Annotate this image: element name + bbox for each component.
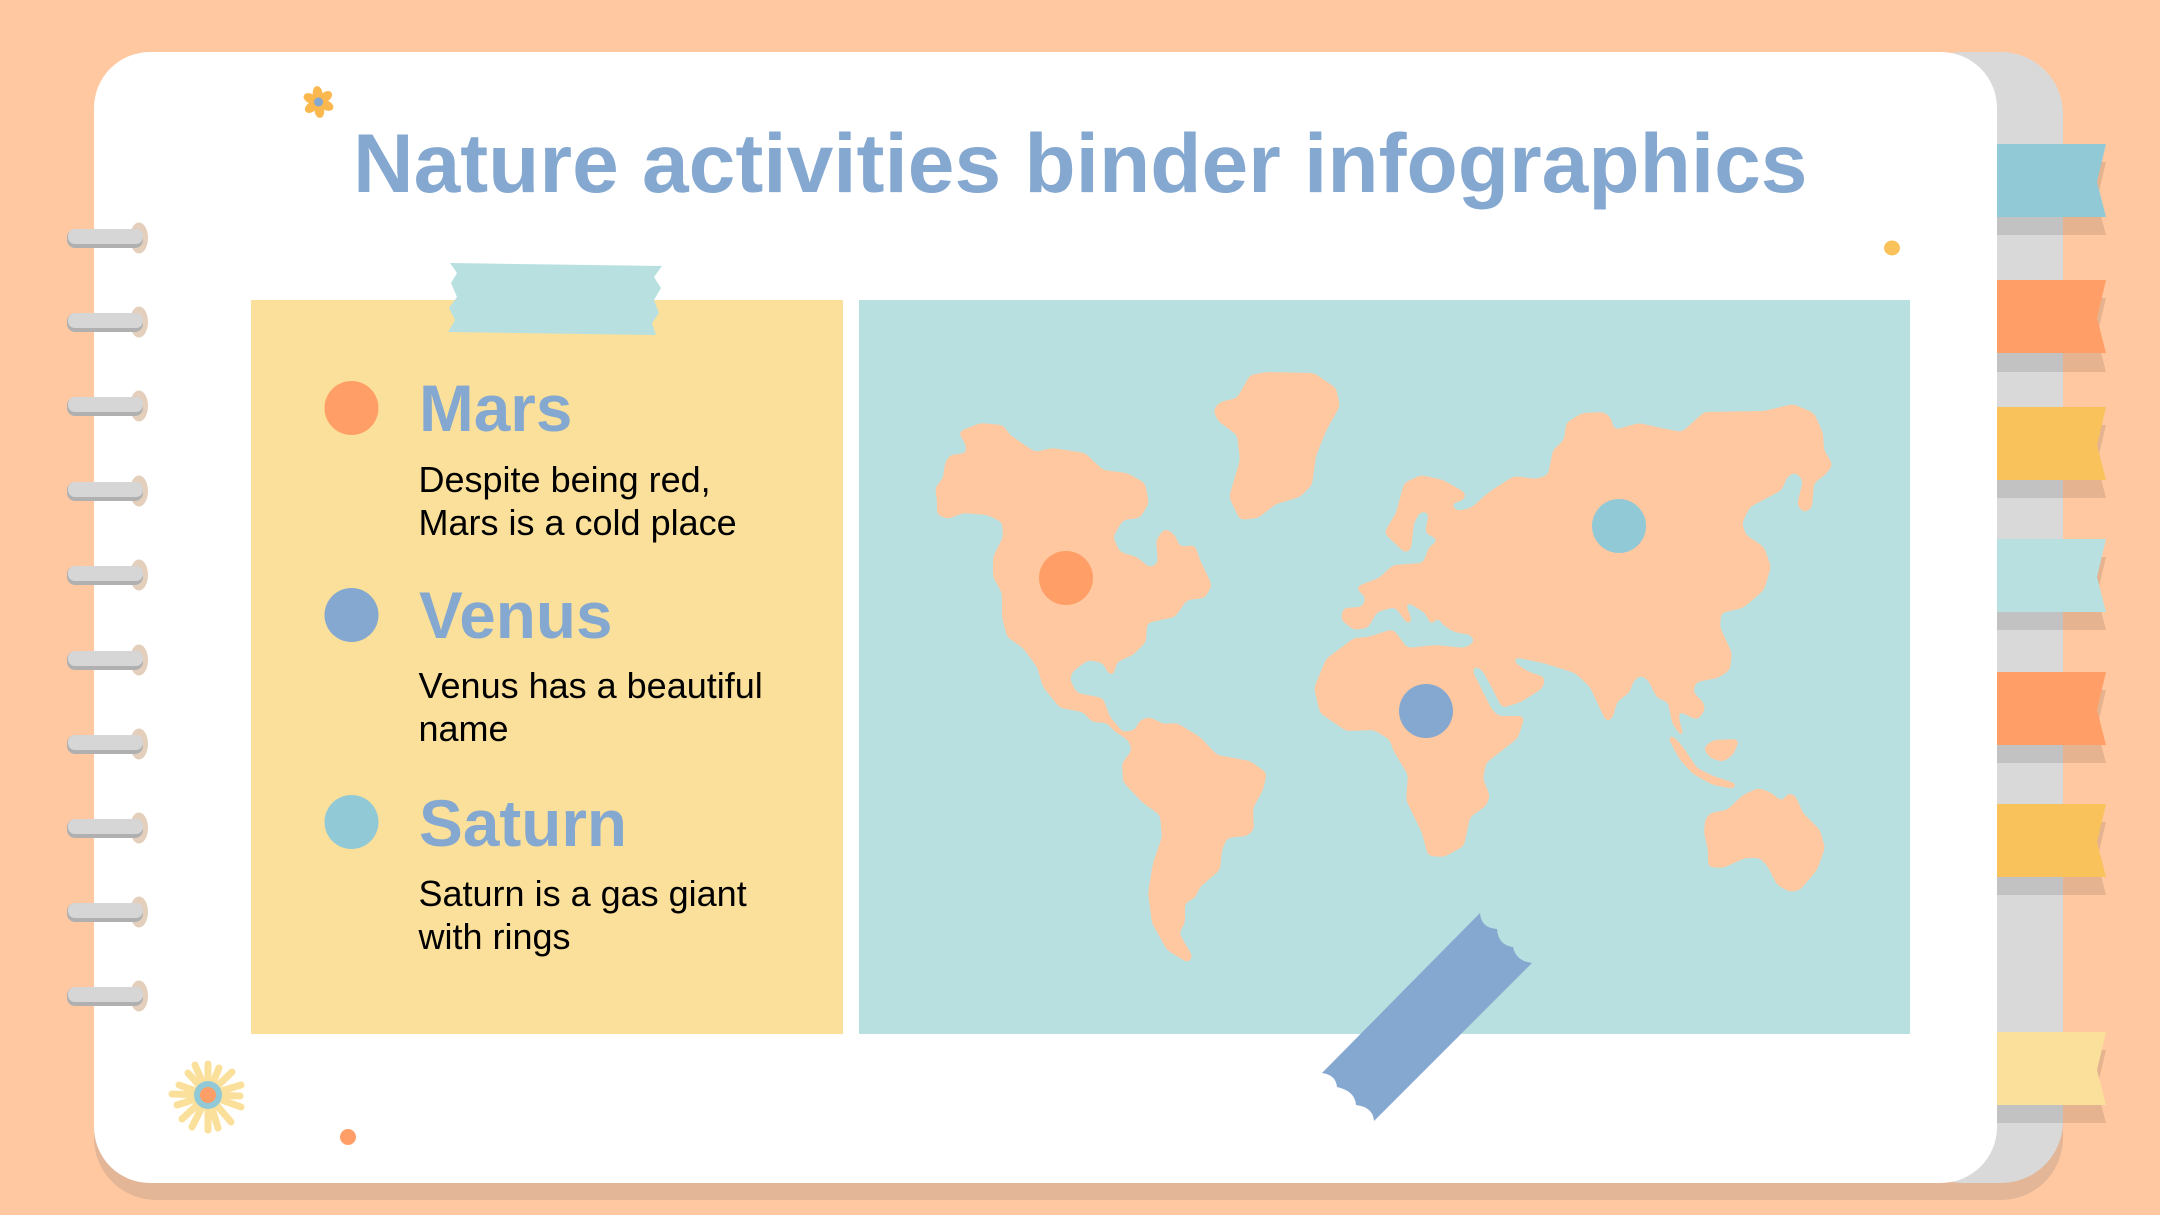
item: Venus: [324, 579, 763, 749]
tab: teal: [1997, 144, 2106, 217]
marker: Saturn: [1592, 499, 1646, 553]
continent: Greenland: [1213, 372, 1340, 520]
ring 6: [67, 644, 148, 676]
panel: world map: [859, 300, 1910, 1034]
item: Saturn: Saturn is a gas giant: [418, 873, 747, 914]
ring 8: [67, 812, 148, 844]
marker: Venus: [1399, 684, 1453, 738]
marker: Mars: [1039, 551, 1093, 605]
binder back page: [1900, 52, 2063, 1183]
tab shadows: [1997, 162, 2106, 1123]
ring 3: [67, 390, 148, 422]
ring 9: [67, 896, 148, 928]
tab: mint: [1997, 539, 2106, 612]
map continents: [935, 372, 1833, 963]
item: Mars: Mars is a cold place: [418, 502, 737, 543]
tab: yellow: [1997, 1032, 2106, 1105]
continent: the Americas: [935, 423, 1267, 963]
tape: blue washi: [1322, 913, 1532, 1121]
continent: Australia: [1704, 788, 1825, 892]
item: Venus: name: [418, 708, 509, 749]
tape: mint washi: [448, 263, 662, 335]
ring 10: [67, 980, 148, 1012]
item: Venus: Venus has a beautiful: [418, 665, 763, 706]
tabs: [1997, 144, 2106, 1105]
item: Mars: [324, 372, 737, 543]
item: Saturn: [324, 787, 747, 957]
item: Mars: Despite being red,: [418, 459, 711, 500]
ring 1: [67, 222, 148, 254]
island: Borneo: [1703, 739, 1740, 762]
item: Saturn: with rings: [418, 916, 571, 957]
decorative dot: amber: [1884, 240, 1900, 256]
title: Nature activities binder infographics: [353, 116, 1807, 210]
island: Sumatra and Java: [1667, 735, 1738, 789]
item: Mars: Mars: [419, 372, 572, 445]
tab: amber: [1997, 407, 2106, 480]
decorative dot: orange: [340, 1129, 356, 1145]
item: Venus: Venus: [419, 579, 613, 652]
ring 4: [67, 476, 148, 506]
tab: orange: [1997, 280, 2106, 353]
tab: amber 2: [1997, 804, 2106, 877]
ring 5: [67, 560, 148, 590]
item: Saturn: Saturn: [419, 787, 627, 860]
binder rings: [67, 222, 148, 1012]
ring 2: [67, 306, 148, 338]
ring 7: [67, 728, 148, 760]
tab: orange 2: [1997, 672, 2106, 745]
panel: planets legend: [251, 300, 843, 1034]
continent: Eurasia and Africa: [1314, 404, 1833, 857]
icon: small flower: [301, 84, 336, 120]
icon: sun flower: [172, 1064, 241, 1130]
